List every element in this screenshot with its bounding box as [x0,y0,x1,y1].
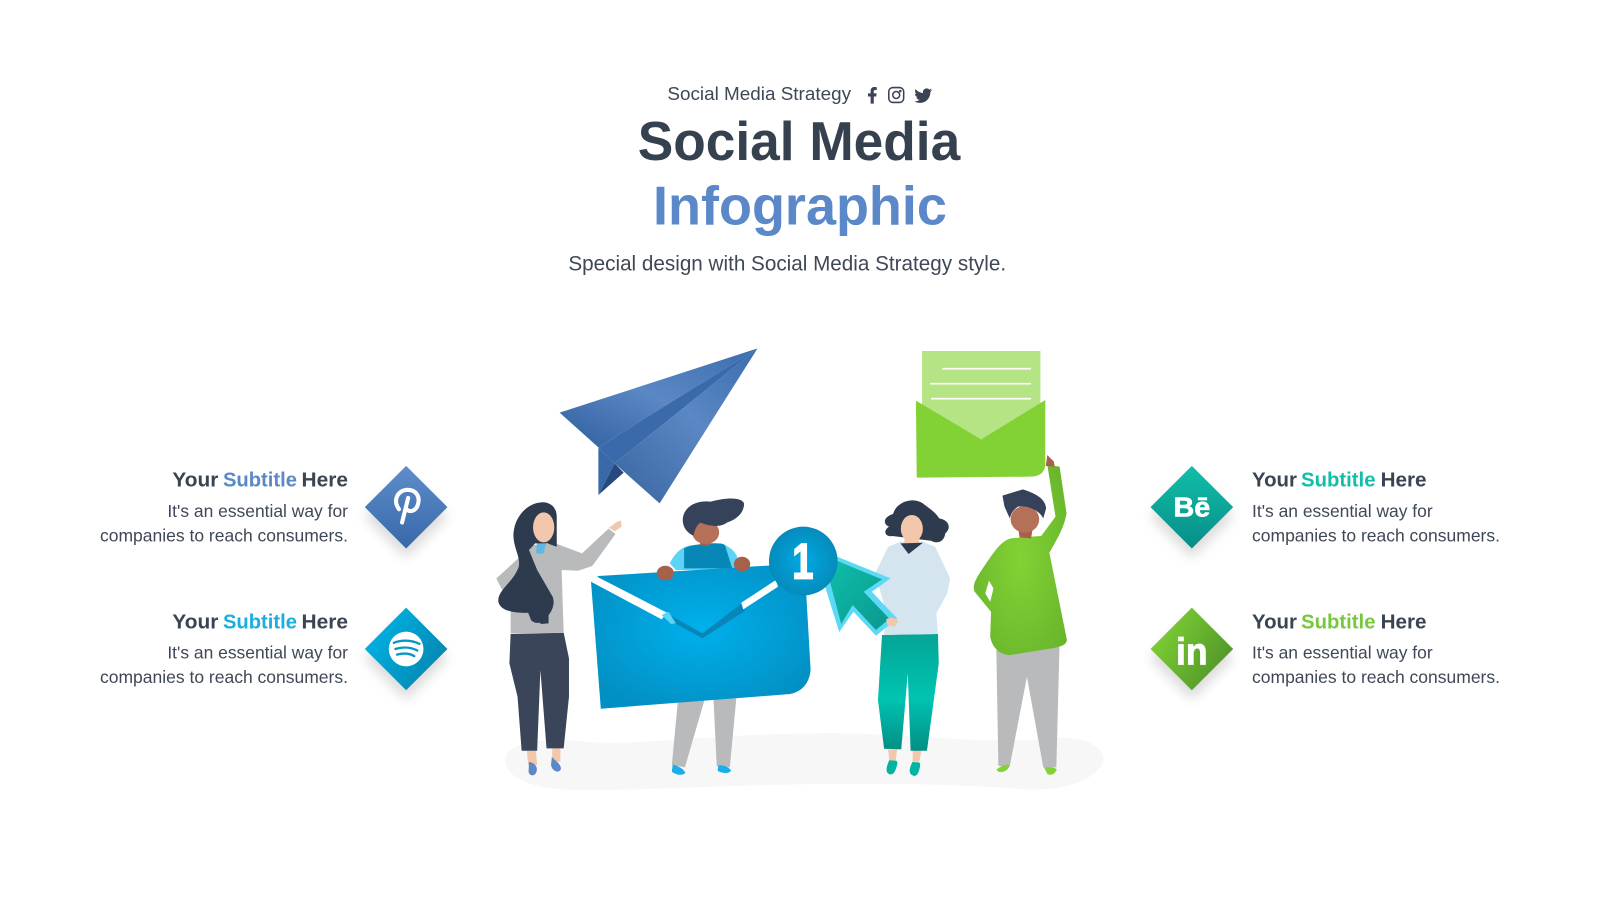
left item 2: Spotify text: It's an essential way for [167,643,348,663]
right item 2: LinkedIn text: companies to reach consumers. [1252,667,1500,687]
right item 1: Behance text [1252,470,1500,545]
left item 2: Spotify text: companies to reach consumers. [100,667,348,687]
central illustration [496,348,1104,790]
icon: instagram [889,88,904,102]
right item 1: Behance text: Subtitle [1301,470,1376,492]
left item 1: Pinterest text: Subtitle [223,470,297,492]
right item 2: LinkedIn text [1252,612,1500,687]
header kicker: Social Media Strategy: Social Media Strategy [667,83,852,104]
person 4: man in green sweater holding envelope [974,455,1067,775]
left item 1: Pinterest text: companies to reach consumers. [100,525,348,545]
title line 1: Social Media [638,110,961,172]
right item 2: LinkedIn text: It's an essential way for [1252,643,1433,663]
left item 1: Pinterest text [100,470,348,545]
social icons row [868,87,932,104]
right item 2: LinkedIn text: Your [1252,612,1297,634]
cursor arrow [813,547,897,636]
person 3: woman with curly hair [875,500,950,776]
title line 2: Infographic [653,174,947,236]
right item 1: Behance text: companies to reach consumers. [1252,525,1500,545]
right item 2: LinkedIn text: Subtitle [1301,612,1376,634]
icon: LinkedIn diamond: in [1176,630,1208,672]
ground shadow [505,733,1104,790]
left item 1: Pinterest text: Here [302,470,348,492]
left item 2: Spotify text: Subtitle [223,612,297,634]
person 1: woman with long hair [496,502,622,775]
left item 2: Spotify text: Here [302,612,348,634]
icon: Pinterest diamond [364,466,448,558]
header description: Special design with Social Media Strategy style. [568,252,1006,275]
notification badge with number 1 [769,527,838,595]
left item 2: Spotify text: Your [172,612,218,634]
icon: twitter [914,88,932,103]
icon: Behance diamond: Bē [1173,491,1210,522]
blue envelope [591,563,811,709]
hand on cursor [886,618,898,627]
icon: Behance diamond [1150,466,1234,558]
left item 1: Pinterest text: It's an essential way for [167,501,348,521]
right item 1: Behance text: It's an essential way for [1252,501,1433,521]
right item 1: Behance text: Your [1252,470,1297,492]
right item 2: LinkedIn text: Here [1381,612,1427,634]
person 2: man behind blue envelope [670,499,744,775]
left item 2: Spotify text [100,612,348,687]
icon: facebook [868,87,877,104]
green envelope with letter [916,351,1045,478]
paper plane [560,348,758,503]
icon: LinkedIn diamond [1150,608,1234,700]
notification badge with number 1: 1 [792,533,813,589]
hands on envelope [657,557,750,580]
left item 1: Pinterest text: Your [172,470,218,492]
notification badge shadow [759,563,807,600]
right item 1: Behance text: Here [1381,470,1427,492]
icon: Spotify diamond [364,608,448,700]
